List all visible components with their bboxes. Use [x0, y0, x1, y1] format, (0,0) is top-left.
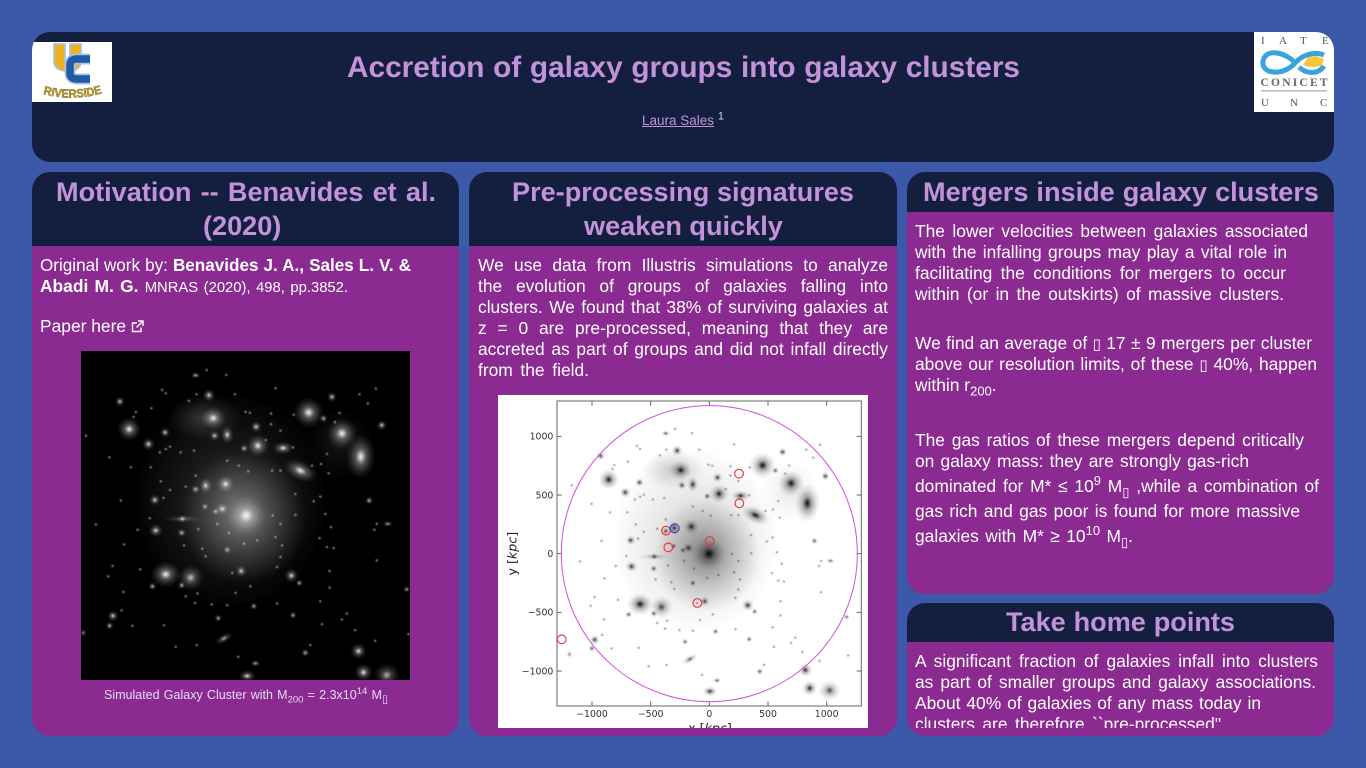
paragraph: merger counts: above our resolution limits, of these ▯ 40%, happen [915, 354, 1317, 374]
logo: IATE CONICET UNC: E [1322, 35, 1329, 47]
r200 circle [561, 406, 857, 702]
heading: pre-processing [469, 172, 897, 246]
logo: IATE CONICET UNC: A [1279, 35, 1287, 47]
paragraph: merger counts [915, 333, 1317, 398]
panel: take home points [907, 603, 1334, 736]
paragraph: velocities: within (or in the outskirts) of massive clusters. [915, 284, 1284, 304]
axis tick labels: 1000 [815, 709, 839, 720]
logo: IATE CONICET UNC: C [1320, 97, 1327, 109]
plot frame and ticks [557, 401, 861, 706]
heading: pre-processing: weaken quickly [584, 210, 783, 241]
heading: mergers: Mergers inside galaxy clusters [923, 176, 1319, 207]
logo: IATE CONICET UNC: U [1261, 97, 1269, 109]
axis tick labels: −500 [528, 608, 553, 619]
paragraph: z = 0 are pre-processed, meaning that they are [478, 318, 888, 338]
title: Accretion of galaxy groups into galaxy clusters [347, 51, 1020, 84]
header panel [32, 32, 1334, 162]
blue marker [670, 524, 679, 533]
image: simulated galaxy cluster [81, 351, 410, 680]
panel: mergers inside galaxy clusters [907, 172, 1334, 594]
heading: take home [907, 603, 1334, 642]
paragraph: gas ratios: gas rich and gas poor is found for more massive [915, 501, 1300, 521]
chart: projected cluster map: y [kpc] [505, 532, 520, 576]
inverted galaxy map [567, 429, 850, 701]
author line: Laura Sales 1 [642, 110, 724, 128]
paragraph: velocities: The lower velocities between galaxies associated [915, 221, 1308, 241]
citation: Original work by: Benavides J. A., Sales L. V. & [40, 256, 411, 275]
paragraph: We use data from Illustris simulations to analyze [478, 255, 888, 275]
paragraph: merger counts: We find an average of ▯ 17 ± 9 mergers per cluster [915, 333, 1312, 353]
take home text: About 40% of galaxies of any mass today in [915, 693, 1261, 713]
axis tick labels: −1000 [522, 666, 553, 677]
axis tick labels: −500 [638, 709, 664, 720]
panel: pre-processing signatures [469, 172, 897, 736]
heading: take home: Take home points [1006, 606, 1235, 637]
image caption: Simulated Galaxy Cluster with M200 = 2.3x1014 M▯ [104, 686, 388, 706]
paragraph: clusters. We found that 38% of surviving galaxies at [478, 297, 888, 317]
logo: IATE CONICET UNC: CONICET [1260, 77, 1328, 89]
mergers body [915, 221, 1319, 550]
axis tick labels: 500 [536, 490, 553, 501]
heading: motivation [32, 172, 459, 246]
chart: projected cluster map [498, 395, 868, 728]
axis tick labels: 0 [547, 549, 553, 560]
paragraph: gas ratios: on galaxy mass: they are strongly gas-rich [915, 451, 1249, 471]
logo: UC Riverside: RIVERSIDE [44, 85, 102, 98]
paragraph: velocities: with the infalling groups may play a vital role in [915, 242, 1287, 262]
logo: IATE CONICET UNC: N [1290, 97, 1298, 109]
paragraph: gas ratios [915, 430, 1319, 550]
panel: motivation [32, 172, 459, 736]
heading: pre-processing: Pre-processing signatures [512, 176, 854, 207]
paragraph: gas ratios: galaxies with M* ≥ 1010 M▯. [915, 523, 1133, 550]
pre-processing body [478, 255, 888, 728]
paragraph: the evolution of groups of galaxies falling into [478, 276, 888, 296]
logo: IATE CONICET UNC [1254, 32, 1334, 112]
heading: motivation: (2020) [203, 210, 281, 241]
paragraph: from the field. [478, 360, 589, 380]
take home text: as part of smaller groups and galaxy associations. [915, 672, 1316, 692]
paragraph: gas ratios: The gas ratios of these mergers depend critically [915, 430, 1304, 450]
logo: IATE CONICET UNC: T [1300, 35, 1307, 47]
logo: UC Riverside [32, 42, 112, 102]
paragraph: velocities [915, 221, 1308, 304]
take home text: A significant fraction of galaxies infall into clusters [915, 651, 1318, 671]
paper link: Paper here [40, 316, 126, 336]
take home text [915, 651, 1318, 728]
heading: motivation: Motivation -- Benavides et al. [56, 176, 436, 207]
axis tick labels: 500 [759, 709, 777, 720]
paragraph: velocities: facilitating the conditions for mergers to occur [915, 263, 1286, 283]
axis tick labels: 1000 [530, 432, 553, 443]
paragraph [478, 255, 888, 380]
paragraph: accreted as part of groups and did not infall directly [478, 339, 888, 359]
axis tick labels: 0 [706, 709, 712, 720]
logo: IATE CONICET UNC: I [1261, 35, 1265, 47]
paragraph: gas ratios: dominated for M* ≤ 109 M▯ ,while a combination of [915, 473, 1319, 500]
motivation body [40, 256, 411, 706]
take home body [915, 651, 1318, 728]
axis tick labels: −1000 [576, 709, 608, 720]
axis tick labels [522, 432, 839, 720]
journal: Abadi M. G. MNRAS (2020), 498, pp.3852. [40, 276, 348, 296]
paragraph: merger counts: within r200. [915, 375, 997, 398]
red group markers [557, 469, 744, 644]
